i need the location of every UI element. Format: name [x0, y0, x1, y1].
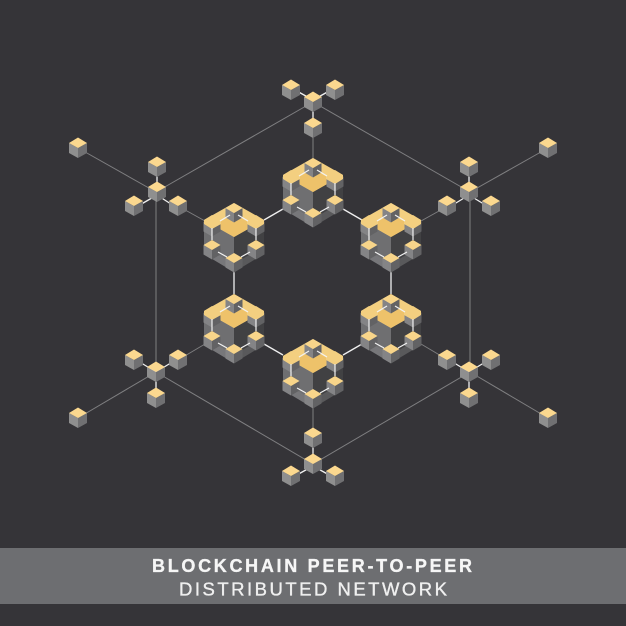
white links between hexagon nodes	[234, 209, 391, 355]
hexagon node: lower left	[204, 294, 264, 364]
title line 2: DISTRIBUTED NETWORK	[179, 578, 448, 600]
hexagon node: top	[282, 158, 344, 228]
hexagon node: bottom	[282, 339, 344, 408]
far node: lower left	[69, 408, 87, 428]
cube cluster: lower right	[438, 350, 500, 408]
far node: upper right	[539, 138, 557, 158]
far node: upper left	[69, 138, 87, 158]
cube cluster: upper right	[438, 156, 500, 216]
cube cluster: upper left	[125, 156, 187, 216]
thin network links	[78, 102, 548, 464]
title line 1: BLOCKCHAIN PEER-TO-PEER	[152, 556, 472, 576]
hexagon node: upper left	[204, 203, 264, 272]
cube cluster: lower left	[125, 350, 187, 408]
cube cluster: bottom	[282, 428, 344, 486]
cube cluster: top	[282, 80, 344, 138]
hexagon node: upper right	[360, 203, 422, 272]
title banner	[0, 548, 626, 604]
hexagon node: lower right	[360, 294, 422, 364]
far node: lower right	[539, 408, 557, 428]
